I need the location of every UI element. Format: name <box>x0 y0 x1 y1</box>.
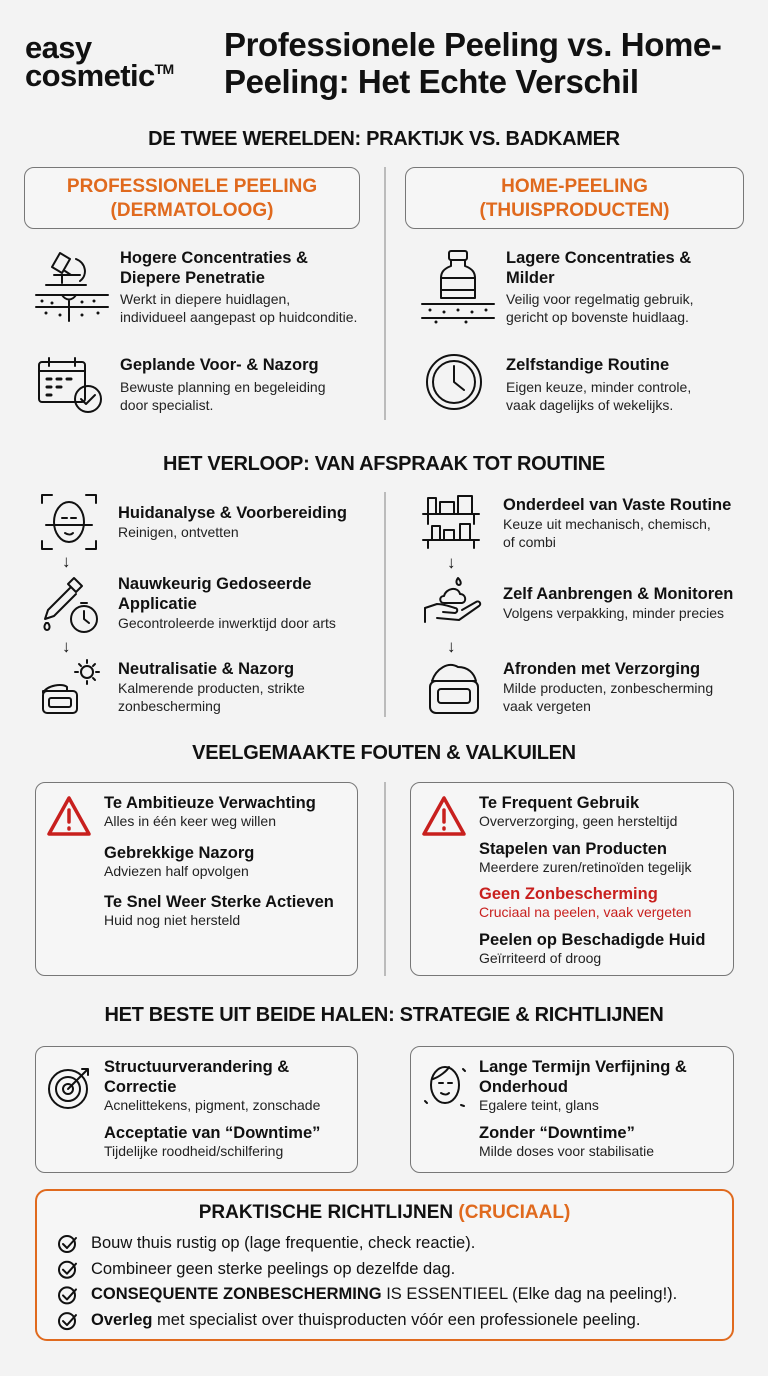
arrow: ↓ <box>62 552 70 571</box>
panel header: home <box>405 167 744 229</box>
icon: target <box>48 1068 89 1109</box>
text: higher concentrations: individueel aangepast op huidconditie. <box>120 308 357 324</box>
text: application: Nauwkeurig Gedoseerde <box>118 575 311 593</box>
text: mistakes list: Alles in één keer weg willen <box>104 813 276 829</box>
text: self apply: Volgens verpakking, minder precies <box>503 605 724 621</box>
text: mistakes list: Huid nog niet hersteld <box>104 912 240 928</box>
text: higher concentrations <box>120 249 357 325</box>
panel header: home: HOME-PEELING <box>501 176 648 197</box>
text: self routine: Zelfstandige Routine <box>506 356 669 374</box>
text: planned care: door specialist. <box>120 396 213 412</box>
heading: section 1: DE TWEE WERELDEN: PRAKTIJK VS. BADKAMER <box>148 128 620 150</box>
heading: section 4: HET BESTE UIT BEIDE HALEN: STRATEGIE & RICHTLIJNEN <box>104 1004 664 1026</box>
text: strategy: Milde doses voor stabilisatie <box>479 1142 654 1158</box>
icon: hand foam <box>424 577 482 623</box>
text: strategy: Acnelittekens, pigment, zonschade <box>104 1097 320 1113</box>
text: strategy: Tijdelijke roodheid/schilfering <box>104 1142 283 1158</box>
panel: pro mistakes <box>35 782 358 976</box>
text: neutralization: zonbescherming <box>118 698 221 714</box>
text: mistakes list <box>479 794 705 966</box>
text: finish: Afronden met Verzorging <box>503 660 700 678</box>
text: lower concentrations <box>506 249 694 325</box>
arrow: ↓ <box>447 553 456 572</box>
text: mistakes list: Te Snel Weer Sterke Actieven <box>104 893 334 911</box>
title: Peeling: Het Echte Verschil <box>224 63 639 100</box>
text: mistakes list: Stapelen van Producten <box>479 840 667 858</box>
icon: cream sun <box>42 659 100 714</box>
icon: warning <box>47 796 91 836</box>
text: application <box>118 575 336 631</box>
text: self apply: Zelf Aanbrengen & Monitoren <box>503 585 733 603</box>
list: guidelines: Bouw thuis rustig op (lage frequentie, check reactie). <box>91 1234 475 1252</box>
icon: face scan <box>41 494 97 550</box>
heading: guidelines: PRAKTISCHE RICHTLIJNEN (CRUCIAAL) <box>199 1202 570 1223</box>
text: strategy <box>479 1058 687 1158</box>
text: planned care <box>120 356 326 413</box>
text: lower concentrations: Lagere Concentraties & <box>506 249 691 267</box>
text: skin analysis: Huidanalyse & Voorbereiding <box>118 504 347 522</box>
text: self apply <box>503 585 733 621</box>
text: strategy: Egalere teint, glans <box>479 1097 599 1113</box>
icon: cream jar <box>429 664 479 714</box>
icons: checkmarks <box>58 1235 78 1330</box>
text: strategy: Structuurverandering & <box>104 1058 289 1076</box>
text: finish: vaak vergeten <box>503 698 591 714</box>
list: guidelines <box>91 1234 677 1329</box>
text: mistakes list: Te Frequent Gebruik <box>479 794 639 812</box>
text: routine part: Keuze uit mechanisch, chemisch, <box>503 516 711 532</box>
text: mistakes list <box>104 794 334 928</box>
text: self routine: Eigen keuze, minder controle, <box>506 379 691 395</box>
text: mistakes list: Oververzorging, geen hersteltijd <box>479 813 677 829</box>
list: guidelines: Overleg met specialist over thuisproducten vóór een professionele peeling. <box>91 1311 640 1329</box>
text: higher concentrations: Werkt in diepere huidlagen, <box>120 291 290 307</box>
text: mistakes list: Geen Zonbescherming <box>479 885 658 903</box>
text: strategy: Correctie <box>104 1078 176 1096</box>
text: mistakes list: Te Ambitieuze Verwachting <box>104 794 316 812</box>
panel header: professional: PROFESSIONELE PEELING <box>67 176 317 197</box>
panel: practical guidelines <box>35 1189 734 1341</box>
icon: clock <box>426 354 482 410</box>
text: planned care: Geplande Voor- & Nazorg <box>120 356 319 374</box>
text: neutralization: Neutralisatie & Nazorg <box>118 660 294 678</box>
text: strategy: Zonder “Downtime” <box>479 1124 635 1142</box>
text: mistakes list: Peelen op Beschadigde Huid <box>479 930 705 948</box>
text: application: Applicatie <box>118 595 197 613</box>
title: Professionele Peeling vs. Home- <box>224 26 721 63</box>
icon: bottle skin <box>421 250 495 324</box>
text: mistakes list: Cruciaal na peelen, vaak vergeten <box>479 904 691 920</box>
panel header: professional <box>24 167 360 229</box>
heading: section 3: VEELGEMAAKTE FOUTEN & VALKUILEN <box>192 742 576 764</box>
text: higher concentrations: Hogere Concentraties & <box>120 249 308 267</box>
logo <box>25 30 174 93</box>
text: routine part <box>503 496 731 550</box>
icon: microscope skin <box>35 252 109 322</box>
text: lower concentrations: gericht op bovenste huidlaag. <box>506 308 689 324</box>
title <box>224 26 721 100</box>
text: self routine <box>506 356 691 413</box>
text: strategy: Onderhoud <box>479 1078 568 1096</box>
text: lower concentrations: Milder <box>506 269 555 287</box>
panel: pro strategy <box>35 1046 358 1173</box>
panel: home strategy <box>410 1046 734 1173</box>
text: higher concentrations: Diepere Penetratie <box>120 269 265 287</box>
text: mistakes list: Gebrekkige Nazorg <box>104 844 254 862</box>
text: finish <box>503 660 713 714</box>
arrow: ↓ <box>447 637 456 656</box>
icon: dropper timer <box>43 577 98 633</box>
panel: home mistakes <box>410 782 734 976</box>
panel header: professional: (DERMATOLOOG) <box>111 200 273 221</box>
icon: shelf <box>422 495 480 549</box>
text: skin analysis <box>118 504 347 540</box>
text: strategy: Lange Termijn Verfijning & <box>479 1058 687 1076</box>
text: lower concentrations: Veilig voor regelmatig gebruik, <box>506 291 694 307</box>
text: routine part: Onderdeel van Vaste Routine <box>503 496 731 514</box>
heading: section 2: HET VERLOOP: VAN AFSPRAAK TOT ROUTINE <box>163 453 605 475</box>
text: neutralization <box>118 660 305 714</box>
text: strategy: Acceptatie van “Downtime” <box>104 1124 320 1142</box>
arrow: ↓ <box>62 637 70 656</box>
text: self routine: vaak dagelijks of wekelijks. <box>506 396 673 412</box>
text: mistakes list: Meerdere zuren/retinoïden tegelijk <box>479 858 691 874</box>
text: neutralization: Kalmerende producten, strikte <box>118 680 305 696</box>
text: strategy <box>104 1058 320 1159</box>
panel header: home: (THUISPRODUCTEN) <box>480 200 670 221</box>
icon: glowing face <box>424 1066 466 1107</box>
text: finish: Milde producten, zonbescherming <box>503 680 713 696</box>
text: planned care: Bewuste planning en begeleiding <box>120 379 326 395</box>
text: mistakes list: Geïrriteerd of droog <box>479 950 601 966</box>
logo: cosmeticTM <box>25 58 174 93</box>
icon: calendar check <box>38 357 102 413</box>
icon: warning <box>422 796 466 836</box>
text: routine part: of combi <box>503 534 556 550</box>
text: skin analysis: Reinigen, ontvetten <box>118 524 239 540</box>
text: mistakes list: Adviezen half opvolgen <box>104 862 249 878</box>
text: application: Gecontroleerde inwerktijd door arts <box>118 615 336 631</box>
list: guidelines: CONSEQUENTE ZONBESCHERMING IS ESSENTIEEL (Elke dag na peeling!). <box>91 1285 677 1303</box>
list: guidelines: Combineer geen sterke peelings op dezelfde dag. <box>91 1260 455 1278</box>
logo: easy <box>25 30 92 65</box>
